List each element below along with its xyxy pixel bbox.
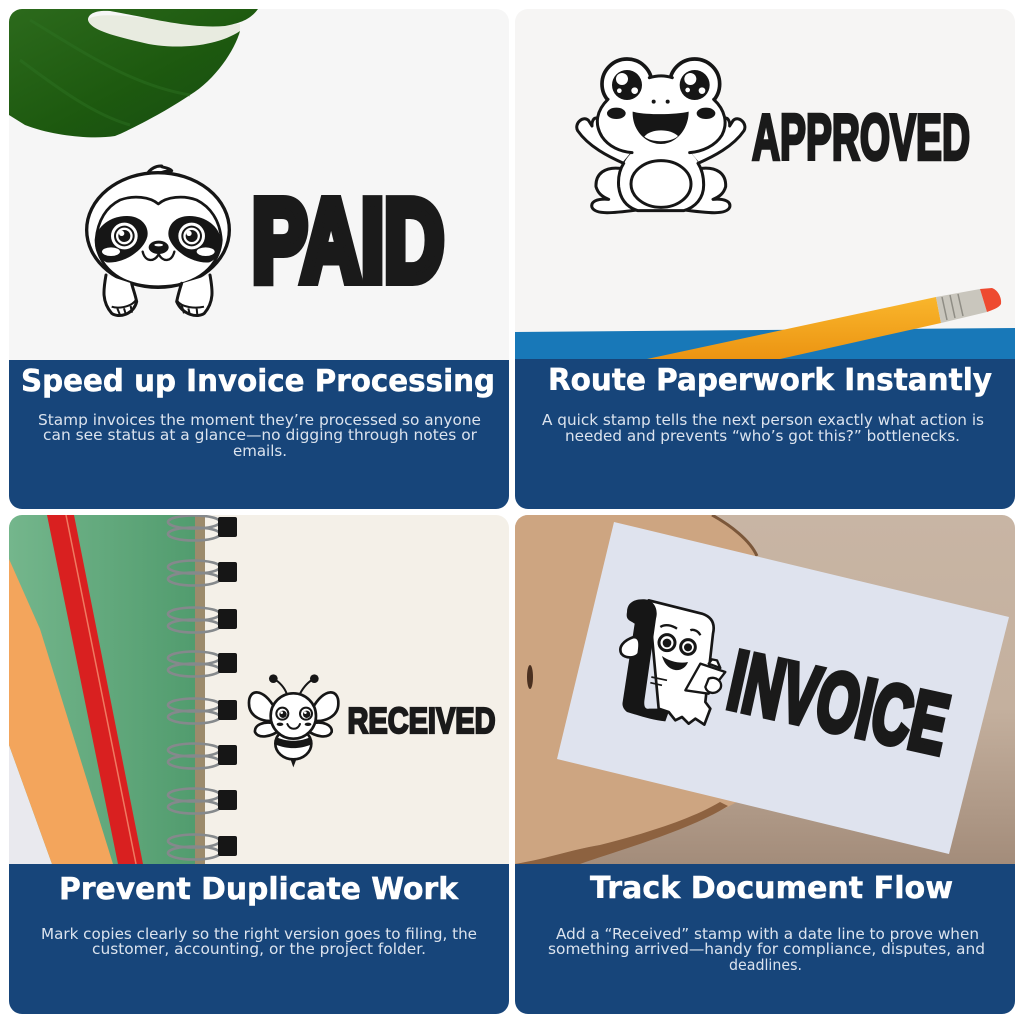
bee wings [249,692,338,736]
caption panel [515,359,1015,510]
scroll clipboard [685,659,725,694]
scroll hand [620,637,640,657]
scroll face [650,625,700,685]
scroll dark side [622,599,669,721]
body text: Stamp invoices the moment they’re processed so anyone [38,411,481,429]
frog eye rims [600,57,722,100]
heading: Route Paperwork Instantly [548,363,992,398]
stamp: bee mascot [249,674,338,767]
body text [39,414,480,456]
bee antennae [269,674,319,694]
bee head [271,693,316,739]
body text: customer, accounting, or the project folder. [92,940,426,958]
stamp: sloth mascot [87,166,229,316]
panel: speed up invoice processing [9,9,509,510]
frog head and body silhouette [597,78,725,211]
photo: spiral notebook, colored paper and red pencil [9,515,509,865]
body text: Add a “Received” stamp with a date line to prove when [556,925,979,943]
stamp: invoice scroll mascot [620,599,725,725]
photo: white card on wood slab [515,515,1015,865]
frog arms [577,118,745,163]
body text: needed and prevents “who’s got this?” bottlenecks. [565,427,960,445]
caption panel [9,864,509,1015]
panel: route paperwork instantly [515,9,1015,510]
body text [548,925,985,974]
body text: can see status at a glance—no digging through notes or [43,426,478,444]
caption panel [9,360,509,510]
stamp word: RECEIVED: RECEIVED [348,700,496,741]
stamp: frog mascot [577,59,745,213]
body text: something arrived—handy for compliance, disputes, and [548,940,985,958]
bee body [275,728,311,767]
frog face [607,100,715,144]
frog legs [592,168,730,213]
body text [42,928,476,957]
body text: A quick stamp tells the next person exactly what action is [542,411,984,429]
panel: track document flow [515,515,1015,1015]
heading: Prevent Duplicate Work [59,872,459,907]
scroll paper [649,600,714,725]
stamp word: PAID: PAID [252,176,444,306]
sloth eye patches and eyes [95,216,221,262]
body text: emails. [233,442,287,460]
body text: Mark copies clearly so the right version goes to filing, the [41,925,477,943]
body text: deadlines. [729,956,802,974]
photo: paper, blue band and pencil [515,9,1015,360]
frog belly [631,161,691,207]
heading: Track Document Flow [590,871,953,906]
sloth arms [104,275,212,316]
body text [542,414,984,444]
frog outline [597,76,725,211]
bee face [275,707,313,729]
photo: white paper with monstera leaf [9,9,509,360]
panel: prevent duplicate work [9,515,509,1015]
caption panel [515,864,1015,1015]
heading: Speed up Invoice Processing [21,364,495,399]
sloth nose and mouth [143,241,174,260]
frog eyes [612,70,710,100]
